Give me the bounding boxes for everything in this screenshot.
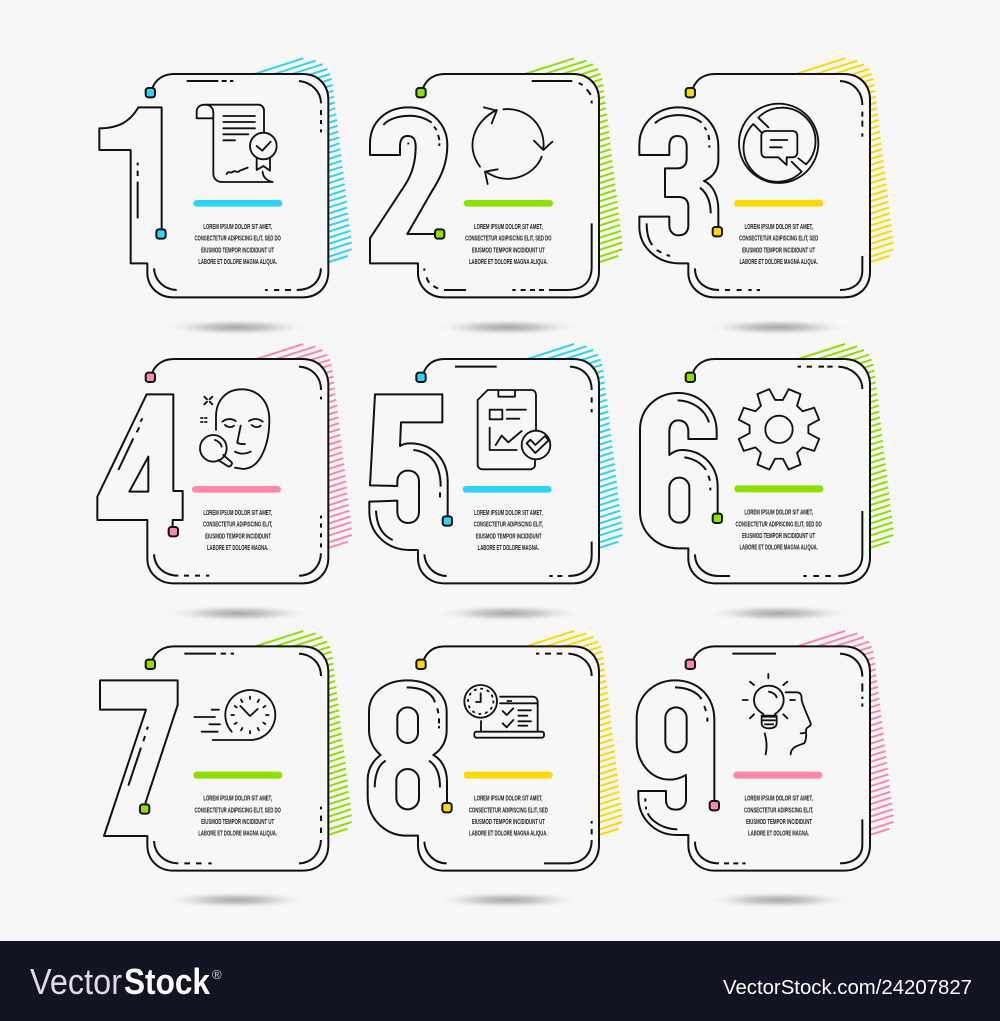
text block (203, 508, 272, 552)
connector nodes (686, 660, 719, 810)
text block: EIUSMOD TEMPOR INCIDIDUNT UT (472, 817, 545, 826)
text block: EIUSMOD TEMPOR INCIDIDUNT UT (742, 245, 815, 254)
connector nodes (416, 88, 444, 239)
stripes (689, 58, 893, 297)
text block: LOREM IPSUM DOLOR SIT AMET, (203, 222, 272, 231)
text block: LOREM IPSUM DOLOR SIT AMET, (474, 222, 543, 231)
text block: LOREM IPSUM DOLOR SIT AMET, (744, 794, 813, 803)
text block: LABORE ET DOLORE MAGNA ALIQUA. (198, 829, 277, 838)
colour bar (464, 772, 553, 779)
floor shadow (163, 605, 313, 622)
footer logo: ® (212, 967, 222, 982)
text block: LABORE ET DOLORE MAGNA ALIQUA. (469, 829, 547, 838)
icon: cycle arrows (472, 107, 552, 184)
text block: CONSECTETUR ADIPISCING ELIT, SED DO (735, 519, 822, 528)
footer logo: Stock (124, 961, 211, 1002)
inner accent dashes (645, 654, 862, 863)
colour bar (192, 486, 281, 493)
connector nodes (146, 373, 178, 536)
text block: CONSECTETUR ADIPISCING ELIT, (474, 520, 543, 529)
connector nodes (416, 660, 452, 812)
panel 2: cycle arrows (370, 58, 622, 336)
icon: certificate (197, 105, 277, 182)
stripes (147, 344, 352, 583)
text block: LOREM IPSUM DOLOR SIT AMET, (203, 508, 272, 517)
numeral 5 and card outline (369, 359, 599, 583)
floor shadow (162, 319, 312, 336)
icon: gear (739, 389, 819, 470)
footer logo: Vector (30, 961, 122, 1002)
footer logo (30, 961, 222, 1002)
colour bar (193, 772, 282, 779)
numeral 9 counter (665, 707, 687, 752)
colour bar (734, 200, 823, 207)
text block: LOREM IPSUM DOLOR SIT AMET, (744, 508, 813, 517)
text block: LOREM IPSUM DOLOR SIT AMET, (474, 794, 542, 803)
panel 3: no chat (639, 58, 893, 336)
text block (465, 222, 552, 266)
numeral 2 and card outline (370, 74, 599, 297)
numeral 8 counters (396, 707, 419, 809)
floor shadow (433, 605, 583, 622)
stripes (147, 631, 352, 870)
panel 7: fast clock (100, 631, 352, 909)
icon: fast clock (194, 690, 275, 740)
text block (739, 222, 818, 266)
text block: CONSECTETUR ADIPISCING ELIT, SED DO (194, 805, 281, 814)
stripes (147, 58, 352, 297)
text block: CONSECTETUR ADIPISCING ELIT, SED DO (194, 234, 281, 243)
inner accent dashes (383, 81, 592, 290)
text block: CONSECTETUR ADIPISCING ELIT, (203, 520, 272, 529)
text block: LOREM IPSUM DOLOR SIT AMET, (744, 222, 813, 231)
connector nodes (686, 373, 722, 523)
icon: laptop checklist with clock (464, 685, 544, 738)
icon: face search (200, 389, 269, 469)
text block: LABORE ET DOLORE MAGNA. (478, 543, 539, 552)
panel 1: certificate (99, 58, 352, 336)
text block: LOREM IPSUM DOLOR SIT AMET, (203, 794, 272, 803)
numeral 1 and card outline (99, 74, 328, 297)
text block: EIUSMOD TEMPOR INCIDIDUNT (205, 531, 271, 540)
text block (744, 794, 813, 838)
text block: EIUSMOD TEMPOR INCIDIDUNT (746, 817, 812, 826)
text block: LABORE ET DOLORE MAGNA ALIQUA. (198, 257, 277, 266)
floor shadow (432, 891, 582, 909)
colour bar (463, 486, 552, 493)
connector nodes (416, 373, 452, 526)
inner accent dashes (647, 81, 862, 290)
stripes (418, 631, 622, 870)
text block: LABORE ET DOLORE MAGNA ALIQUA. (469, 257, 548, 266)
text block: LABORE ET DOLORE MAGNA. (748, 829, 809, 838)
connector nodes (686, 88, 722, 236)
connector nodes (146, 88, 166, 239)
text block: EIUSMOD TEMPOR INCIDIDUNT UT (201, 817, 274, 826)
stripes (689, 631, 893, 870)
numeral 6 counter (669, 478, 689, 523)
floor shadow (704, 605, 854, 622)
colour bar (733, 772, 822, 779)
text block (194, 794, 281, 838)
connector nodes (140, 660, 155, 814)
stripes (418, 58, 622, 297)
numeral 8 and card outline (368, 646, 599, 871)
floor shadow (703, 891, 853, 909)
text block: CONSECTETUR ADIPISCING ELIT, (744, 805, 813, 814)
colour bar (734, 485, 823, 492)
numeral 3 and card outline (639, 74, 870, 297)
numeral 4 and card outline (97, 359, 328, 583)
text block (474, 508, 543, 552)
panel 8: laptop checklist (368, 631, 622, 909)
text block: LABORE ET DOLORE MAGNA. (207, 543, 268, 552)
floor shadow (432, 319, 582, 336)
icon: report with check (478, 390, 550, 469)
stripes (689, 344, 893, 583)
text block: LOREM IPSUM DOLOR SIT AMET, (474, 508, 543, 517)
icon: idea head (743, 674, 811, 754)
inner accent dashes (375, 654, 592, 863)
colour bar (193, 200, 282, 207)
panel 5: report (369, 344, 622, 622)
icon: no chat (739, 104, 818, 183)
colour bar (464, 200, 553, 207)
text block: CONSECTETUR ADIPISCING ELIT, SED (739, 234, 818, 243)
panel 6: gear (640, 344, 893, 622)
text block (469, 794, 548, 838)
inner accent dashes (376, 367, 592, 576)
footer image id: VectorStock.com/24207827 (723, 977, 972, 999)
text block: EIUSMOD TEMPOR INCIDIDUNT UT (742, 531, 815, 540)
stripes (418, 344, 622, 583)
inner accent dashes (138, 81, 321, 290)
numeral 4 counter (129, 457, 148, 492)
floor shadow (162, 891, 312, 909)
numeral 6 and card outline (640, 359, 870, 583)
text block: CONSECTETUR ADIPISCING ELIT, SED DO (465, 234, 552, 243)
text block (194, 222, 281, 266)
text block: EIUSMOD TEMPOR INCIDIDUNT (476, 531, 542, 540)
numeral 7 and card outline (100, 646, 328, 871)
text block (735, 508, 822, 552)
floor shadow (703, 319, 853, 336)
inner accent dashes (118, 367, 321, 576)
numeral 9 and card outline (637, 646, 870, 871)
panel 4: face search (97, 344, 352, 622)
text block: EIUSMOD TEMPOR INCIDIDUNT UT (472, 245, 545, 254)
text block: LABORE ET DOLORE MAGNA ALIQUA. (739, 257, 818, 266)
footer bar (0, 941, 1000, 1021)
text block: EIUSMOD TEMPOR INCIDIDUNT UT (201, 245, 274, 254)
inner accent dashes (678, 367, 862, 576)
text block: CONSECTETUR ADIPISCING ELIT, SED (469, 805, 548, 814)
inner accent dashes (128, 654, 321, 863)
panel 9: idea head (637, 631, 893, 909)
text block: LABORE ET DOLORE MAGNA ALIQUA. (739, 543, 818, 552)
